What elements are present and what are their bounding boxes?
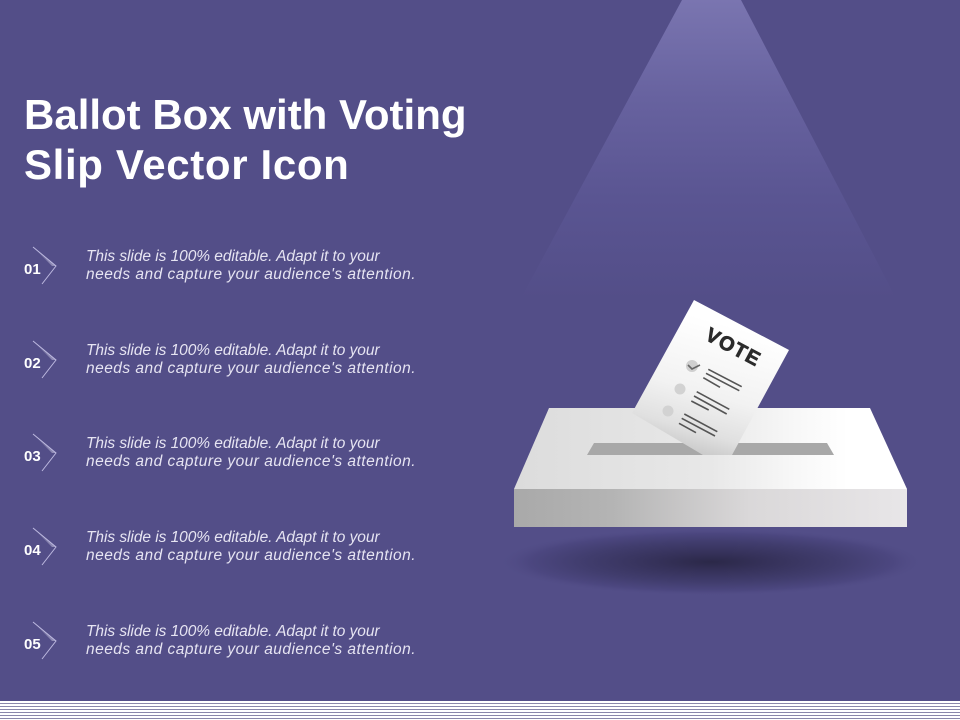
title: Slip Vector Icon [24, 141, 349, 188]
item 02: This slide is 100% editable. Adapt it to your [86, 342, 380, 359]
item 05: This slide is 100% editable. Adapt it to your [86, 623, 380, 640]
title: Ballot Box with Voting [24, 91, 467, 138]
item 05: 05 [24, 636, 41, 653]
option dots [674, 384, 686, 394]
ballot box [514, 408, 907, 527]
vote label: VOTE [702, 324, 765, 371]
striped footer band [0, 701, 960, 720]
spotlight beam [520, 0, 897, 300]
item 03: This slide is 100% editable. Adapt it to your [86, 435, 380, 452]
item 01: This slide is 100% editable. Adapt it to your [86, 248, 380, 265]
text lines [679, 369, 742, 436]
item 05: needs and capture your audience's attention. [86, 641, 416, 658]
item 03 [24, 434, 416, 472]
item 05 [24, 622, 416, 660]
item 04: needs and capture your audience's attention. [86, 547, 416, 564]
item 03: needs and capture your audience's attention. [86, 453, 416, 470]
item 02 [24, 340, 416, 378]
shadow under box [497, 528, 925, 596]
voting slip [632, 300, 789, 455]
check mark [686, 360, 698, 372]
item 03: 03 [24, 448, 41, 465]
item 04: This slide is 100% editable. Adapt it to your [86, 529, 380, 546]
item 04 [24, 528, 416, 566]
item 01 [24, 246, 416, 284]
title [24, 91, 467, 188]
item 01: needs and capture your audience's attention. [86, 266, 416, 283]
item 02: needs and capture your audience's attention. [86, 360, 416, 377]
item 04: 04 [24, 542, 41, 559]
item 01: 01 [24, 261, 41, 278]
item 02: 02 [24, 355, 41, 372]
